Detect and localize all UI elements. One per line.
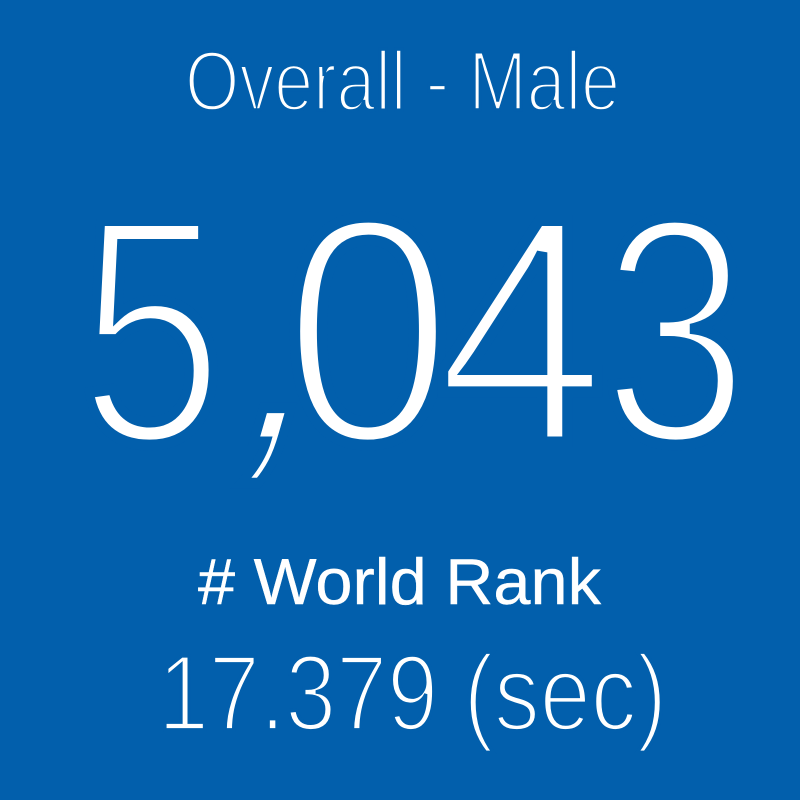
- main number: [79, 151, 749, 511]
- main number: 0: [283, 152, 453, 511]
- title: Overall - Male: [185, 34, 620, 128]
- subtitle: world rank: # World Rank: [198, 545, 602, 618]
- main number: ,: [207, 151, 390, 511]
- time value: 17.379 (sec): [158, 632, 667, 753]
- main number: 3: [602, 152, 749, 511]
- main number: 4: [436, 152, 606, 511]
- main number: 5: [79, 152, 224, 511]
